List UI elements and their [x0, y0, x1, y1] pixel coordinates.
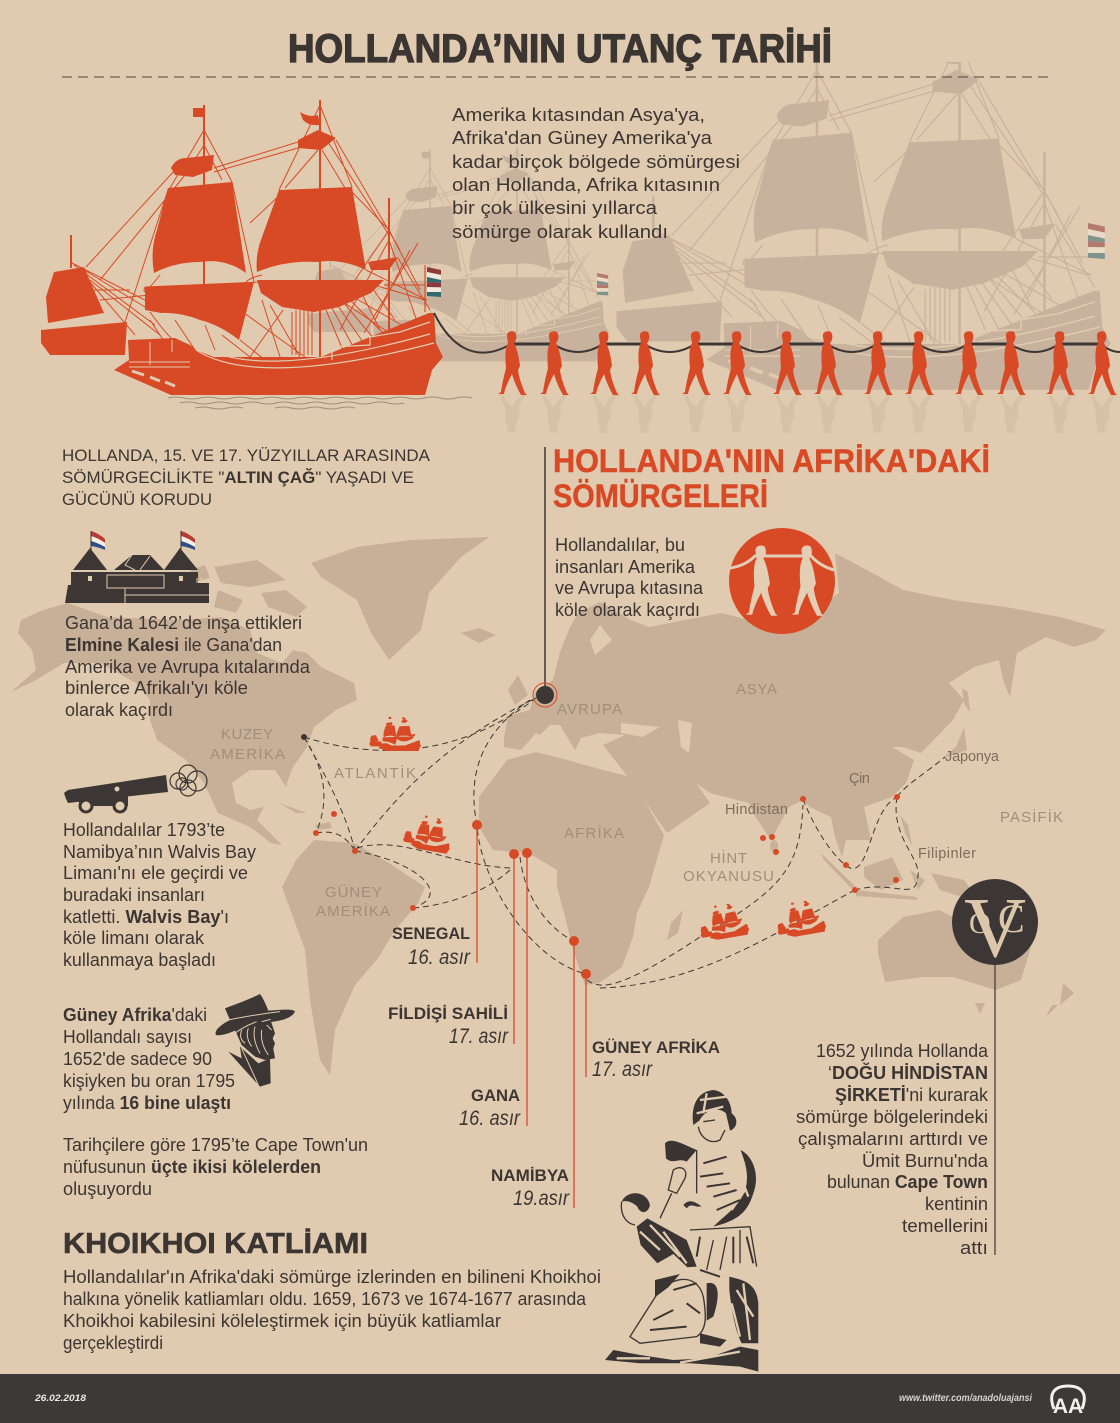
- Boer settlers text: Güney Afrika'daki: [63, 1005, 207, 1025]
- title: HOLLANDA’NIN UTANÇ TARİHİ: [288, 27, 832, 71]
- golden age text: [62, 446, 431, 509]
- intro text: Amerika kıtasından Asya'ya,: [452, 105, 705, 125]
- small ships on routes: [370, 717, 826, 942]
- Khoikhoi text: halkına yönelik katliamları oldu. 1659, 1673 ve 1674-1677 arasında: [63, 1289, 587, 1309]
- kidnapped text: [555, 535, 704, 620]
- Boer settlers text: 1652'de sadece 90: [63, 1049, 212, 1069]
- East India Company text: temellerini: [902, 1216, 988, 1236]
- Boer settlers text: kişiyken bu oran 1795: [63, 1071, 235, 1091]
- inland seas: [590, 625, 761, 862]
- icon: VOC badge: [952, 879, 1038, 1255]
- intro text: bir çok ülkesini yıllarca: [452, 198, 658, 218]
- heading: colonies: [553, 443, 990, 514]
- kidnapped text: ve Avrupa kıtasına: [555, 578, 704, 598]
- Europe marker: [533, 683, 557, 707]
- footer date: 26.02.2018: [34, 1393, 87, 1404]
- Walvis Bay text: Limanı'nı ele geçirdi ve: [63, 863, 248, 883]
- Boer settlers text: [63, 1005, 235, 1113]
- leader line to Europe: [544, 447, 546, 690]
- Southeast Asia islands: [821, 815, 981, 903]
- Australia: [878, 905, 1031, 990]
- colony labels: 16. asır: [408, 946, 471, 969]
- Khoikhoi text: Hollandalılar'ın Afrika'daki sömürge izlerinden en bilineni Khoikhoi: [63, 1267, 601, 1287]
- icon: VOC badge: V: [964, 879, 1026, 975]
- colony labels: 19.asır: [513, 1187, 570, 1210]
- map labels: Filipinler: [918, 846, 976, 862]
- icon: Elmine fort: [65, 531, 209, 603]
- Khoikhoi text: Khoikhoi kabilesini köleleştirmek için büyük katliamlar: [63, 1311, 501, 1331]
- kidnapped text: insanları Amerika: [555, 557, 696, 577]
- intro text: kadar birçok bölgede sömürgesi: [452, 152, 740, 172]
- East India Company text: attı: [960, 1238, 988, 1258]
- North America: [11, 603, 357, 845]
- Cape Town text: nüfusunun üçte ikisi kölelerden: [63, 1157, 321, 1177]
- colony marker lines: [477, 825, 586, 1208]
- map labels: AMERİKA: [316, 902, 390, 920]
- Walvis Bay text: katletti. Walvis Bay'ı: [63, 907, 229, 927]
- colony labels: 16. asır: [459, 1107, 521, 1130]
- Walvis Bay text: Hollandalılar 1793’te: [63, 820, 225, 840]
- Walvis Bay text: kullanmaya başladı: [63, 950, 216, 970]
- Walvis Bay text: buradaki insanları: [63, 885, 205, 905]
- East India Company text: sömürge bölgelerindeki: [796, 1107, 988, 1127]
- kidnapped text: Hollandalılar, bu: [555, 535, 685, 555]
- South America: [282, 840, 425, 1075]
- Greenland: [311, 537, 489, 660]
- slaves in chain: [498, 331, 1117, 395]
- intro text: sömürge olarak kullandı: [452, 222, 668, 242]
- intro text: olan Hollanda, Afrika kıtasının: [452, 175, 720, 195]
- Elmine text: binlerce Afrikalı'yı köle: [65, 678, 248, 698]
- world map: [11, 537, 1106, 1075]
- rope chain: [434, 313, 1120, 353]
- British Isles: [508, 675, 528, 705]
- Eurasia: [504, 553, 1106, 857]
- golden age text: SÖMÜRGECİLİKTE "ALTIN ÇAĞ" YAŞADI VE: [62, 468, 414, 487]
- map labels: Japonya: [945, 749, 1000, 765]
- Japan and Sakhalin: [931, 688, 970, 767]
- ghost ship small: [308, 146, 609, 361]
- Tasmania and New Zealand: [975, 983, 1074, 1017]
- golden age text: GÜCÜNÜ KORUDU: [62, 490, 212, 509]
- heading: colonies: HOLLANDA'NIN AFRİKA'DAKİ: [553, 443, 990, 479]
- East India Company text: ‘DOĞU HİNDİSTAN: [828, 1062, 988, 1083]
- icon: slaves badge: [729, 528, 835, 634]
- Elmine text: olarak kaçırdı: [65, 700, 173, 720]
- colony labels: FİLDİŞİ SAHİLİ: [388, 1004, 508, 1023]
- East India Company text: çalışmalarını arttırdı ve: [798, 1129, 988, 1149]
- Khoikhoi text: gerçekleştirdi: [63, 1333, 163, 1353]
- East India Company text: [796, 1041, 989, 1258]
- ship flag: [425, 265, 441, 312]
- red ship: [41, 100, 443, 395]
- map labels: ASYA: [736, 681, 777, 698]
- intro text: [452, 105, 740, 242]
- footer url: www.twitter.com/anadoluajansi: [899, 1393, 1032, 1404]
- Elmine text: [65, 613, 311, 720]
- heading: colonies: SÖMÜRGELERİ: [553, 478, 768, 514]
- water ripples: [168, 397, 472, 409]
- East India Company text: Ümit Burnu'nda: [862, 1151, 989, 1171]
- Cape Town text: [63, 1135, 368, 1199]
- Sri Lanka: [770, 840, 778, 852]
- colony labels: GANA: [471, 1086, 520, 1105]
- map labels: [210, 681, 1063, 920]
- colony labels: 17. asır: [592, 1058, 653, 1081]
- colony labels: 17. asır: [449, 1025, 509, 1048]
- heading: Khoikhoi: KHOIKHOI KATLİAMI: [63, 1228, 368, 1260]
- icon: cannon: [64, 765, 207, 812]
- Elmine text: Gana’da 1642’de inşa ettikleri: [65, 613, 302, 633]
- East India Company text: bulunan Cape Town: [827, 1172, 988, 1192]
- Iceland: [461, 628, 496, 643]
- map labels: HİNT: [710, 849, 747, 867]
- Elmine text: Amerika ve Avrupa kıtalarında: [65, 657, 311, 677]
- footer bar: [0, 1374, 1120, 1423]
- kidnapped text: köle olarak kaçırdı: [555, 600, 700, 620]
- East India Company text: kentinin: [925, 1194, 988, 1214]
- map labels: PASİFİK: [1000, 808, 1063, 826]
- map labels: AMERİKA: [210, 745, 285, 763]
- icon: VOC badge: C: [998, 896, 1025, 941]
- Walvis Bay text: köle limanı olarak: [63, 928, 205, 948]
- colony labels: NAMİBYA: [491, 1166, 569, 1185]
- map labels: Hindistan: [725, 802, 788, 818]
- route dots: [301, 734, 900, 979]
- East India Company text: 1652 yılında Hollanda: [816, 1041, 989, 1061]
- colony labels: SENEGAL: [392, 924, 470, 943]
- Cape Town text: Tarihçilere göre 1795’te Cape Town'un: [63, 1135, 368, 1155]
- Khoikhoi text: [63, 1267, 601, 1353]
- map labels: ATLANTİK: [334, 764, 416, 782]
- Africa: [479, 752, 664, 985]
- icon: Dutch settler portrait: [216, 994, 295, 1087]
- slave reflections: [498, 395, 1117, 433]
- colony labels: [388, 924, 720, 1210]
- ghost flags: [597, 223, 1105, 296]
- map labels: Çin: [849, 771, 870, 787]
- Madagascar: [667, 910, 683, 940]
- map labels: GÜNEY: [325, 883, 382, 901]
- Boer settlers text: Hollandalı sayısı: [63, 1027, 192, 1047]
- illustration: Khoikhoi statue: [605, 1090, 758, 1372]
- Cape Town text: oluşuyordu: [63, 1179, 152, 1199]
- Walvis Bay text: [63, 820, 256, 970]
- golden age text: HOLLANDA, 15. VE 17. YÜZYILLAR ARASINDA: [62, 446, 431, 465]
- map labels: KUZEY: [221, 726, 273, 743]
- map labels: AFRİKA: [564, 824, 624, 842]
- East India Company text: ŞİRKETİ'ni kurarak: [835, 1085, 989, 1105]
- logo: AA: AA: [1053, 1395, 1083, 1418]
- colony labels: GÜNEY AFRİKA: [592, 1038, 720, 1057]
- Elmine text: Elmine Kalesi ile Gana'dan: [65, 635, 282, 655]
- ghost ship large: [616, 34, 1111, 390]
- logo: AA: [1052, 1386, 1084, 1418]
- sea routes: [304, 698, 945, 988]
- Boer settlers text: yılında 16 bine ulaştı: [63, 1093, 231, 1113]
- Arctic islands: [190, 560, 332, 830]
- icon: VOC badge: O: [969, 907, 991, 940]
- Walvis Bay text: Namibya’nın Walvis Bay: [63, 842, 256, 862]
- intro text: Afrika'dan Güney Amerika'ya: [452, 128, 713, 148]
- map labels: AVRUPA: [557, 701, 622, 718]
- map labels: OKYANUSU: [683, 868, 774, 885]
